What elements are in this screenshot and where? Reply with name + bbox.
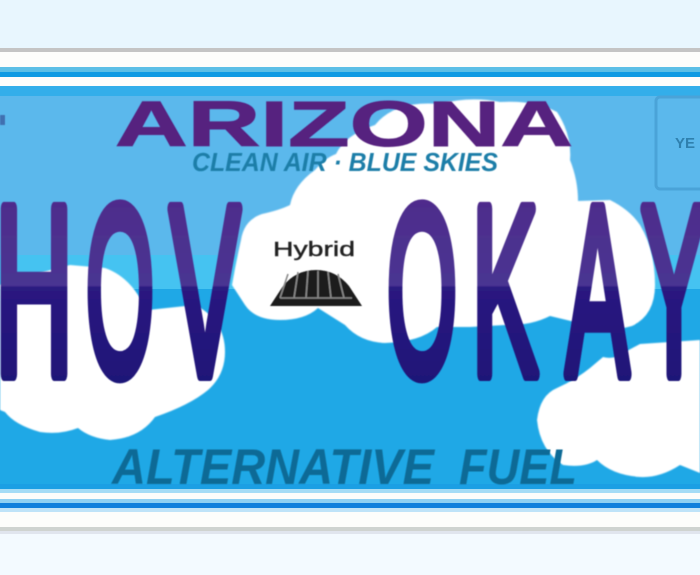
plate characters: HOV: O xyxy=(86,157,154,425)
left edge mark xyxy=(0,115,5,125)
registration sticker box xyxy=(656,97,700,189)
plate characters: HOV: H xyxy=(0,157,73,425)
slogan: CLEAN AIR · BLUE SKIES xyxy=(192,147,499,177)
clouds xyxy=(0,99,700,477)
registration sticker box: YE xyxy=(675,135,695,152)
footer: ALTERNATIVE FUEL: FUEL xyxy=(459,439,577,495)
license plate infographic: V xyxy=(170,157,240,425)
main cloud xyxy=(232,99,655,343)
plate characters: OKAY: K xyxy=(472,157,538,425)
bottom right cloud xyxy=(537,340,700,477)
footer: ALTERNATIVE FUEL: ALTERNATIVE xyxy=(110,439,436,495)
icon: hybrid badge: Hybrid xyxy=(273,239,355,261)
icon: hybrid badge xyxy=(270,239,362,306)
heading: ARIZONA: ARIZONA xyxy=(115,88,573,160)
bright band behind letters xyxy=(0,255,700,289)
left cloud xyxy=(0,265,225,440)
plate characters: OKAY: O xyxy=(387,157,457,425)
plate characters: OKAY xyxy=(387,157,700,425)
plate sky xyxy=(0,86,700,489)
